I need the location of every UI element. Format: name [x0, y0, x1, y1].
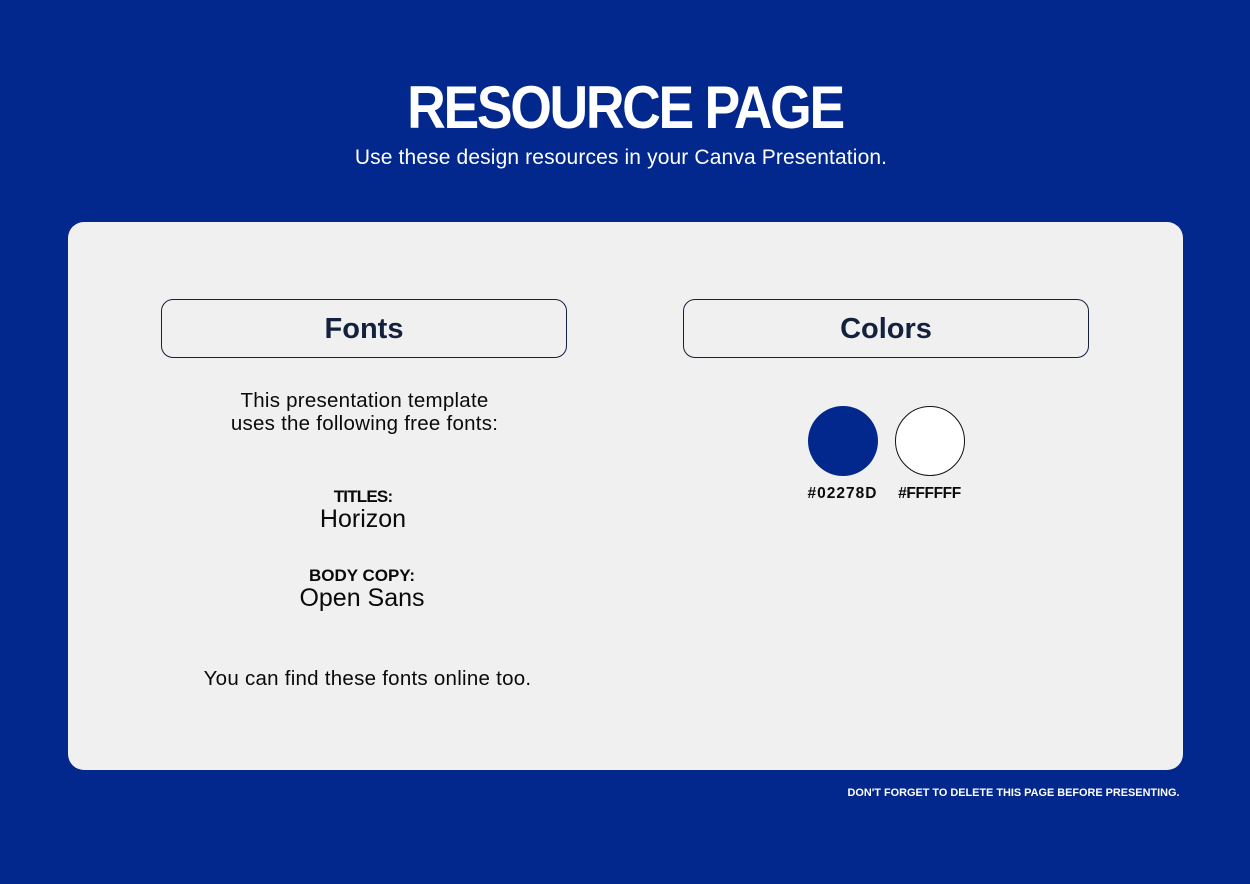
text: body copy font: BODY COPY:: [309, 566, 415, 585]
swatch: blue: [808, 406, 878, 476]
text: body copy font: Open Sans: [299, 584, 425, 612]
label: blue hex: #02278D: [808, 485, 877, 502]
label: white hex: #FFFFFF: [898, 485, 961, 502]
footer note: DON'T FORGET TO DELETE THIS PAGE BEFORE PRESENTING.: [848, 787, 1179, 799]
text: titles font: Horizon: [320, 505, 406, 533]
text: fonts intro: uses the following free fonts:: [231, 412, 498, 435]
swatch: white: [895, 406, 965, 476]
subtitle: Use these design resources in your Canva Presentation.: [355, 146, 887, 169]
text: titles font: TITLES:: [334, 487, 392, 506]
heading: colors: Colors: [840, 313, 932, 345]
heading: colors: [683, 299, 1089, 358]
text: fonts intro: This presentation template: [240, 389, 489, 412]
text: fonts note: You can find these fonts online too.: [204, 667, 531, 690]
text: titles font: [320, 487, 406, 533]
heading: fonts: Fonts: [325, 313, 403, 345]
title: RESOURCE PAGE: [407, 74, 843, 141]
text: fonts intro: [231, 389, 498, 435]
panel: resources: [68, 222, 1183, 770]
text: body copy font: [299, 566, 425, 612]
heading: fonts: [161, 299, 567, 358]
